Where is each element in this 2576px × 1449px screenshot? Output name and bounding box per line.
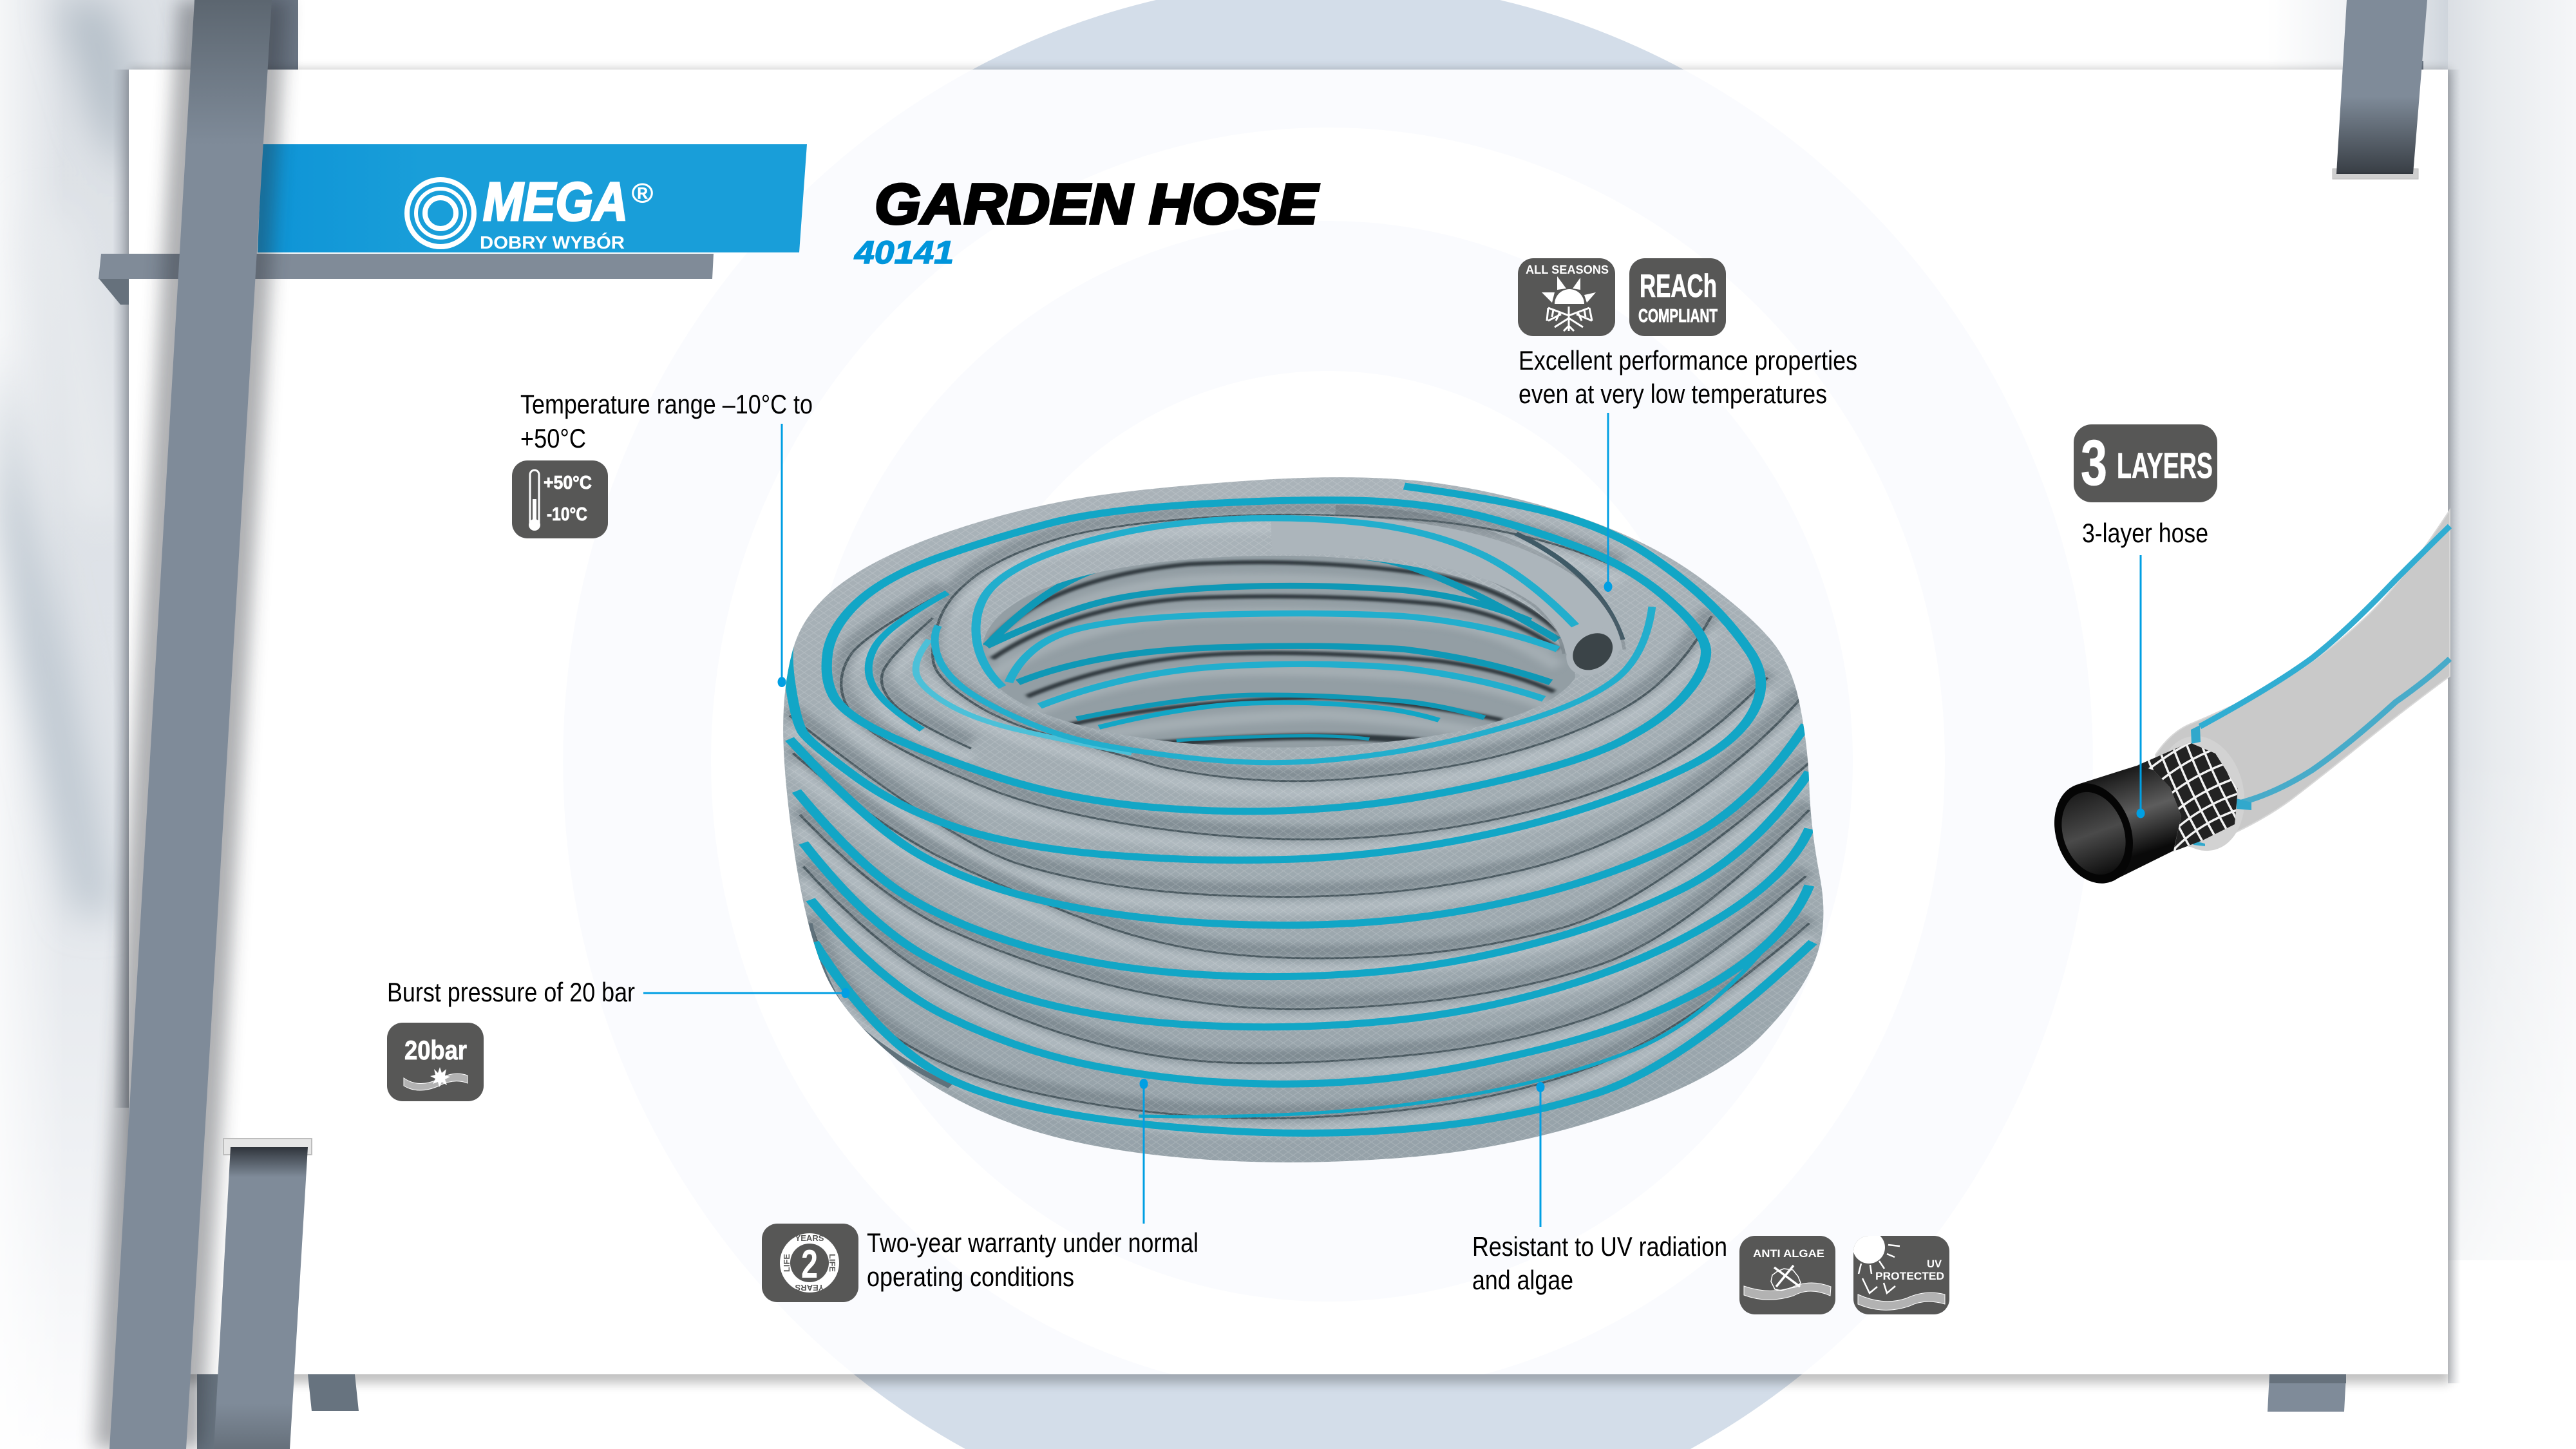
snowflake [1547,307,1592,331]
icon: warranty badge: YEARS [795,1233,824,1243]
algae cross [1771,1265,1801,1291]
hose coil photo [783,477,1824,1162]
icon: 3 layers badge: 3 [2081,427,2107,499]
registered mark: ® [632,178,653,208]
row stripes [987,551,1558,741]
temperature text: +50°C [520,423,586,453]
icon: anti algae badge: ANTI ALGAE [1753,1247,1824,1260]
bar shadows [94,0,287,1449]
background drape: left [0,0,194,1449]
warranty text [867,1227,1198,1292]
coil centre opening [950,536,1614,762]
icon: UV protected badge: UV [1927,1258,1942,1270]
logo banner [258,144,807,252]
lower bar cap [223,1139,312,1155]
brand name: MEGA [483,171,628,232]
concentric rings [563,0,2093,1449]
performance text: Excellent performance properties [1519,345,1857,375]
UV text [1472,1231,1727,1295]
icon: 3 layers badge: LAYERS [2117,445,2213,486]
large diagonal bar [109,0,272,1449]
light teal ring stripes [935,518,1652,762]
callout line: warranty [1140,1079,1148,1224]
burst hose [404,1074,468,1090]
slogan: DOBRY WYBÓR [480,232,625,252]
teal stripes front [788,486,1813,1133]
stripe ends [2191,725,2251,846]
sun [1542,276,1596,304]
burst pressure text: Burst pressure of 20 bar [387,977,635,1007]
bottom stubs [197,1374,2346,1449]
braid layer [2125,715,2264,869]
top-right bar cap [2333,169,2418,179]
lower bar [214,1147,308,1449]
icon: warranty badge: 2 [801,1242,818,1287]
callout line: UV resistance [1537,1082,1544,1227]
top-right bar [2336,0,2427,174]
UV text: and algae [1472,1265,1573,1295]
icon: REACh badge [1629,258,1726,336]
top-left bar stub [267,0,298,70]
icon: 20 bar badge [387,1023,484,1101]
horizontal bar [99,254,714,305]
hose [1744,1283,1831,1300]
coil silhouette [783,477,1823,1162]
temperature text: Temperature range –10°C to [520,389,813,419]
coil gaps [790,515,1809,1119]
band shadows [790,508,1809,1112]
row highlights [992,579,1558,742]
icon: temperature badge: +50°C [544,473,592,493]
hose cross-section [2041,510,2450,895]
performance text [1519,345,1857,409]
background circle [563,0,2093,1449]
icon: temperature badge [512,460,608,538]
performance text: even at very low temperatures [1519,379,1827,409]
band highlights [790,527,1809,1131]
black inner tube [2078,765,2181,882]
hose stripes [2200,526,2450,804]
temperature text [520,389,813,453]
icon: UV protected badge: PROTECTED [1875,1270,1944,1282]
burst star [430,1067,450,1087]
callout line: 3 layers [2137,555,2145,818]
icon: REACh badge: REACh [1640,268,1717,304]
outer layer [2155,510,2450,847]
icon: anti algae badge [1739,1236,1835,1314]
callout line: burst pressure [643,988,850,998]
hose end tube [1271,526,1622,652]
rays [1859,1245,1900,1274]
icon: warranty badge: LIFE [828,1254,837,1272]
row shadows [992,562,1558,725]
sun [1853,1231,1885,1264]
title: GARDEN HOSE [875,172,1319,236]
tube end [2041,772,2146,895]
hose texture [783,478,1824,1162]
icon: all seasons badge [1518,258,1615,336]
cut face [2148,728,2255,859]
icon: 20 bar badge: 20bar [404,1035,467,1065]
icon: all seasons badge: ALL SEASONS [1526,263,1609,276]
UV text: Resistant to UV radiation [1472,1231,1727,1262]
lower left dark edge [809,923,950,1086]
top-right bar stub [2415,61,2423,70]
logo rings [407,180,474,247]
icon: warranty badge [762,1224,858,1302]
bottom shadow [1132,737,1467,746]
icon: warranty badge: YEARS [795,1283,824,1293]
3-layer text: 3-layer hose [2082,518,2208,548]
hose opening [1558,623,1628,680]
icon: warranty badge: LIFE [782,1254,791,1272]
product code: 40141 [854,234,954,270]
callout line: temperature [778,424,786,687]
coil shading and stripes [783,478,1824,1162]
icon: temperature badge: -10°C [547,504,587,525]
reflected rays [1862,1278,1895,1293]
warranty text: operating conditions [867,1262,1074,1292]
icon: REACh badge: COMPLIANT [1638,306,1718,327]
callout line: performance [1604,413,1613,592]
icon: 3 layers badge [2074,424,2217,502]
background drape: right [2267,0,2576,1383]
warranty text: Two-year warranty under normal [867,1227,1198,1258]
thermometer [529,470,540,531]
icon: UV protected badge [1853,1231,1949,1314]
hose [1858,1293,1945,1310]
